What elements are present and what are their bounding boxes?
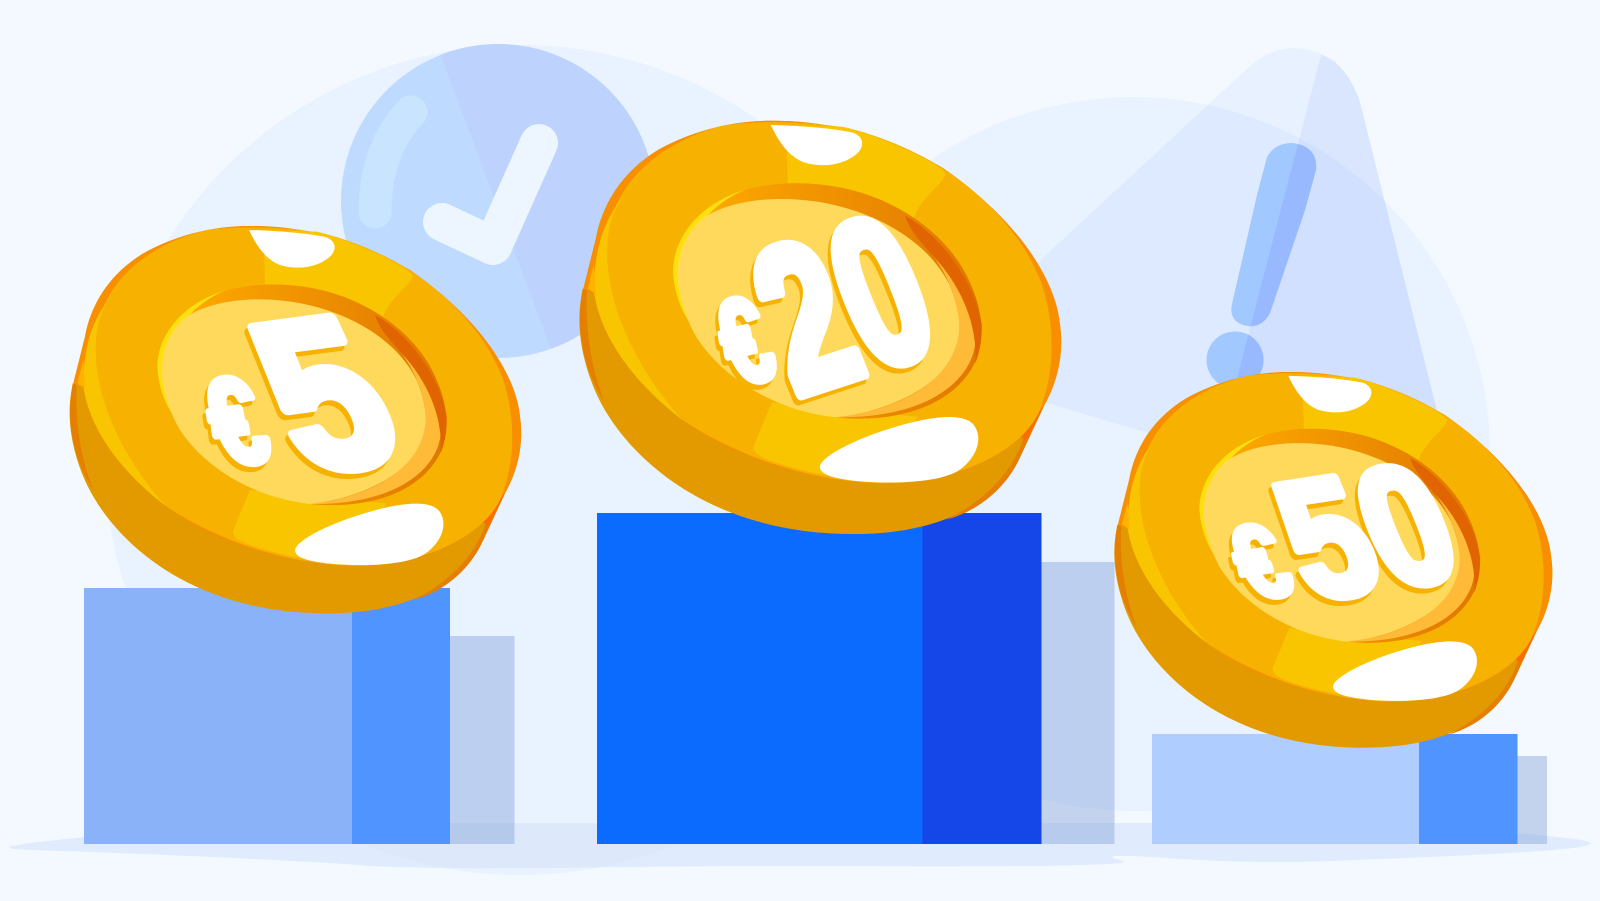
- bar: right podium: [1152, 734, 1518, 844]
- background circle right: [776, 97, 1490, 811]
- background circle left: [105, 45, 935, 875]
- value label: 20: [725, 171, 962, 437]
- back bar right: [1517, 756, 1547, 844]
- icon: check circle: [341, 44, 655, 358]
- circle highlight arc: [375, 112, 411, 212]
- back bar left: [450, 636, 514, 844]
- check mark: [442, 143, 539, 246]
- coin: 5 euro: [70, 226, 521, 613]
- triangle right tone: [1248, 54, 1436, 410]
- bar: centre podium: [597, 513, 1042, 844]
- coin: 50 euro: [1114, 372, 1552, 748]
- value label: €: [187, 350, 285, 492]
- coin body: [70, 226, 521, 613]
- exclamation mark: [1206, 143, 1316, 388]
- bar: left podium: [84, 588, 450, 844]
- coin body: [1114, 372, 1552, 748]
- value label: 50: [1251, 429, 1482, 634]
- value label: 5: [219, 273, 430, 516]
- coin: 20 euro: [579, 121, 1061, 534]
- triangle left tone: [925, 48, 1466, 527]
- coin body: [579, 121, 1061, 534]
- back bar centre: [1041, 562, 1114, 844]
- value label: €: [700, 272, 791, 411]
- value label: €: [1211, 502, 1309, 621]
- ground shadow: [9, 823, 1591, 868]
- icon: warning triangle with exclamation mark: [1038, 48, 1437, 433]
